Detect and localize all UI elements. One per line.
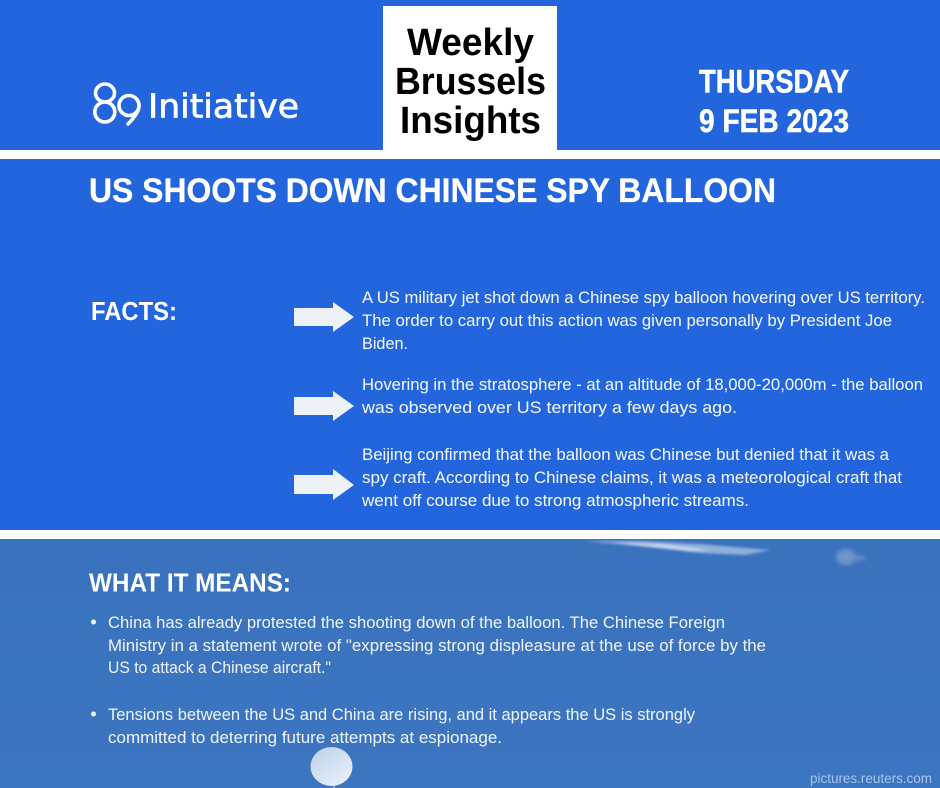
fact 2 text: Hovering in the stratosphere - at an altitude of 18,000-20,000m - the balloon: [362, 375, 923, 394]
logo: 89 Initiative: Initiative: [148, 86, 299, 126]
title card: Weekly Brussels Insights: Brussels: [395, 61, 546, 103]
fact 1 text: A US military jet shot down a Chinese spy balloon hovering over US territory.: [362, 288, 925, 307]
panel: facts: [0, 159, 940, 530]
fact 1 text: Biden.: [362, 334, 408, 353]
bullet 2: committed to deterring future attempts at espionage.: [108, 728, 502, 747]
date: [699, 64, 849, 139]
title card: Weekly Brussels Insights: Insights: [400, 100, 541, 142]
date: THURSDAY: [699, 64, 849, 100]
logo: 89 Initiative: [95, 84, 299, 126]
divider band: top: [0, 150, 940, 159]
photo: balloon: [310, 747, 352, 788]
arrow: fact 3: [294, 469, 354, 500]
fact 2 text: was observed over US territory a few days ago.: [361, 398, 737, 417]
title card: Weekly Brussels Insights: [383, 6, 557, 152]
bullet 2: Tensions between the US and China are rising, and it appears the US is strongly: [108, 705, 695, 724]
bullet 2: [91, 705, 695, 747]
fact 1 text: [362, 288, 925, 353]
bullet 1: China has already protested the shooting down of the balloon. The Chinese Foreign: [108, 613, 725, 632]
photo credit: pictures.reuters.com: [810, 771, 932, 786]
photo: distant aircraft: [836, 549, 866, 565]
fact 3 text: spy craft. According to Chinese claims, it was a meteorological craft that: [362, 468, 902, 487]
panel: header band: [0, 0, 940, 152]
date: 9 FEB 2023: [699, 103, 849, 139]
arrow: fact 2: [294, 391, 354, 421]
fact 3 text: [361, 445, 902, 510]
fact 3 text: went off course due to strong atmospheric streams.: [361, 491, 749, 510]
heading: WHAT IT MEANS:: [89, 568, 291, 598]
title card: Weekly Brussels Insights: Weekly: [407, 22, 534, 64]
fact 2 text: [361, 375, 923, 417]
bullet 1: US to attack a Chinese aircraft.": [108, 658, 331, 677]
arrow: fact 1: [294, 302, 354, 332]
bullet 1: Ministry in a statement wrote of "expressing strong displeasure at the use of force by the: [108, 636, 766, 655]
bullet 1: [91, 613, 766, 677]
fact 1 text: The order to carry out this action was given personally by President Joe: [362, 311, 892, 330]
panel: what it means: [0, 539, 940, 788]
facts heading: FACTS:: [91, 296, 177, 326]
fact 3 text: Beijing confirmed that the balloon was Chinese but denied that it was a: [362, 445, 890, 464]
divider band: bottom: [0, 530, 940, 539]
photo: contrail: [585, 541, 770, 555]
headline: US SHOOTS DOWN CHINESE SPY BALLOON: [89, 172, 776, 210]
